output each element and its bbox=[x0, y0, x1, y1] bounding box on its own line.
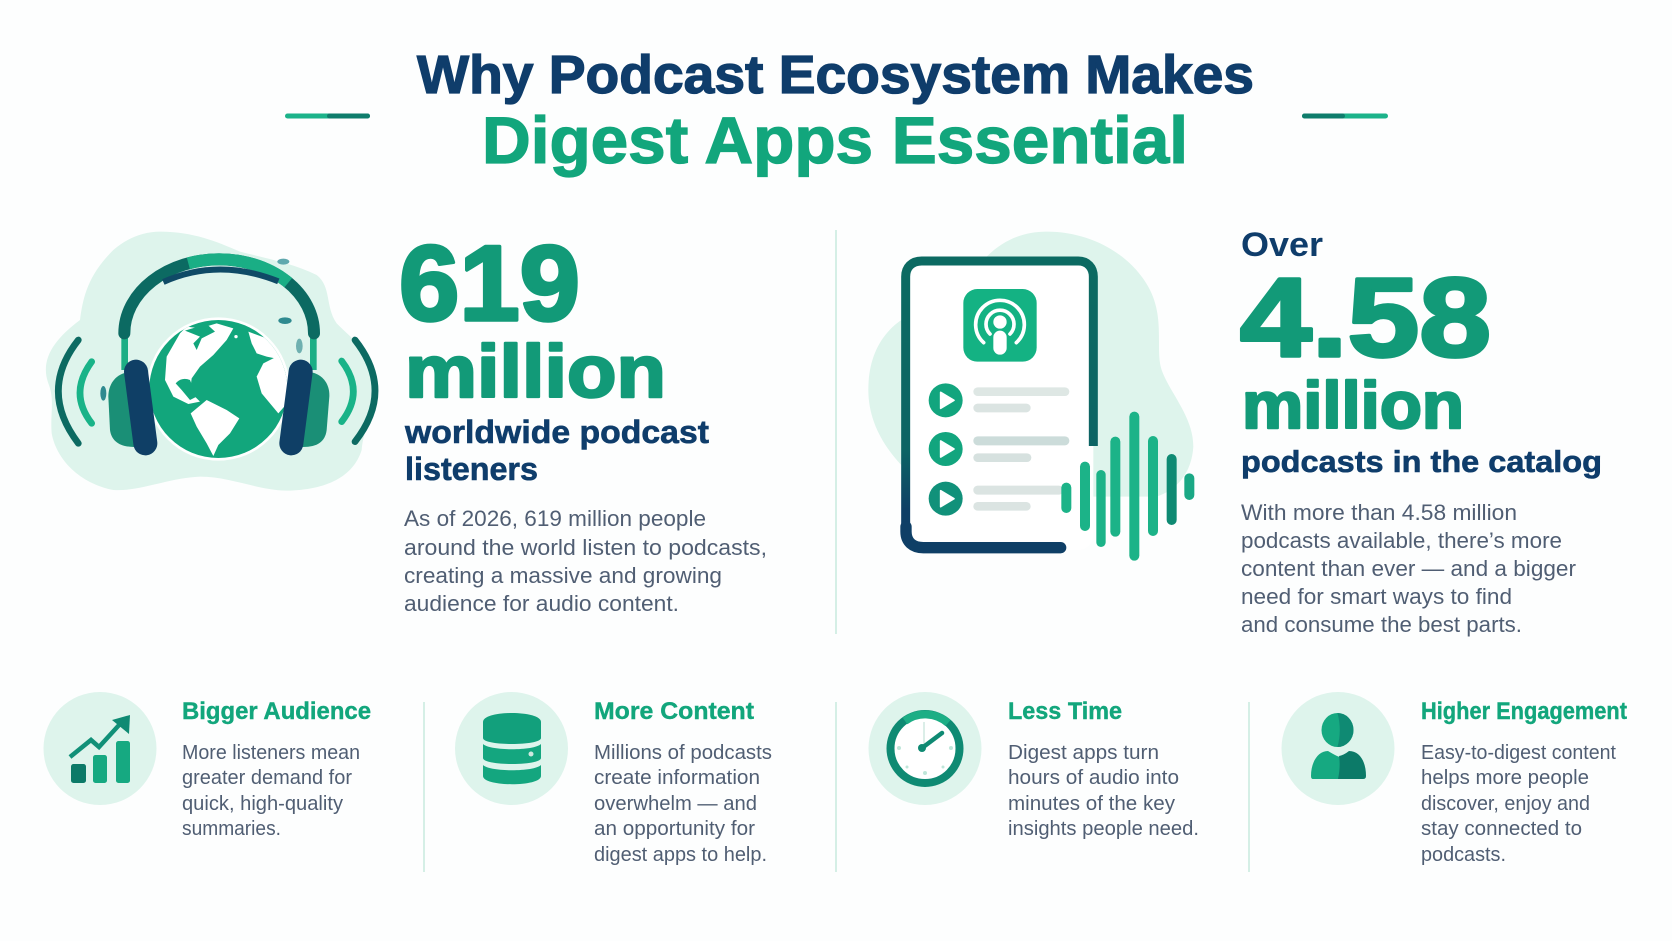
text block: 4.58 million description: need for smart ways to find bbox=[1241, 584, 1512, 609]
text block: 4.58 million description bbox=[1241, 500, 1576, 637]
panel: bigger audience bbox=[44, 692, 371, 840]
text block: 4.58 million description: and consume the best parts. bbox=[1241, 612, 1522, 637]
text block: digest apps to help. bbox=[594, 844, 767, 866]
text block: Easy-to-digest content bbox=[1421, 742, 1616, 764]
text block: 619 million description: creating a massive and growing bbox=[404, 563, 722, 588]
text block bbox=[1421, 742, 1616, 866]
stat label: worldwide podcast listeners bbox=[404, 414, 709, 487]
title rule right bbox=[1302, 114, 1388, 118]
text block: podcasts. bbox=[1421, 844, 1506, 866]
title rule left bbox=[285, 114, 370, 118]
panel: higher engagement bbox=[1282, 692, 1627, 866]
text block: an opportunity for bbox=[594, 818, 755, 840]
text block: minutes of the key bbox=[1008, 793, 1175, 815]
text block: quick, high-quality bbox=[182, 793, 343, 815]
text block: 4.58 million description: content than ever — and a bigger bbox=[1241, 556, 1576, 581]
text block: Millions of podcasts bbox=[594, 742, 772, 764]
text block: helps more people bbox=[1421, 767, 1589, 789]
text block: stay connected to bbox=[1421, 818, 1582, 840]
stat label: worldwide podcast listeners: listeners bbox=[405, 451, 538, 487]
text block: discover, enjoy and bbox=[1421, 793, 1590, 815]
title: Why Podcast Ecosystem Makes bbox=[417, 45, 1254, 105]
text block: create information bbox=[594, 767, 760, 789]
icon: database bbox=[455, 692, 568, 805]
icon: growth chart bbox=[44, 692, 156, 805]
text block: 4.58 million description: With more than 4.58 million bbox=[1241, 500, 1517, 525]
text block: hours of audio into bbox=[1008, 767, 1179, 789]
heading: Bigger Audience bbox=[182, 698, 371, 725]
icon: headphones around globe bbox=[46, 232, 377, 491]
text block: 619 million description bbox=[404, 506, 767, 616]
stat: 619 million bbox=[399, 223, 666, 413]
stat: over 4.58 million: million bbox=[1242, 368, 1464, 442]
icon: person bbox=[1282, 692, 1394, 805]
heading: Higher Engagement bbox=[1421, 698, 1627, 725]
text block bbox=[594, 742, 772, 866]
text block: insights people need. bbox=[1008, 818, 1199, 840]
stat: 619 million: million bbox=[405, 330, 666, 413]
title: Digest Apps Essential bbox=[482, 103, 1188, 177]
text block: overwhelm — and bbox=[594, 793, 757, 815]
text block bbox=[1008, 742, 1199, 840]
text block: 4.58 million description: podcasts available, there’s more bbox=[1241, 528, 1562, 553]
stat: over 4.58 million: Over bbox=[1241, 226, 1323, 264]
text block: Digest apps turn bbox=[1008, 742, 1159, 764]
icon: phone with podcast app and sound wave bbox=[868, 232, 1194, 561]
text block: summaries. bbox=[182, 818, 281, 840]
stat: over 4.58 million bbox=[1240, 226, 1491, 442]
text block: 619 million description: As of 2026, 619 million people bbox=[404, 506, 706, 531]
text block: greater demand for bbox=[182, 767, 352, 789]
stat label: podcasts in the catalog: podcasts in the catalog bbox=[1241, 444, 1602, 479]
panel: more content bbox=[455, 692, 772, 866]
icon: clock bbox=[868, 692, 982, 805]
heading: More Content bbox=[594, 698, 754, 725]
text block bbox=[182, 742, 360, 840]
text block: More listeners mean bbox=[182, 742, 360, 764]
title bbox=[417, 45, 1254, 177]
stat label: worldwide podcast listeners: worldwide podcast bbox=[404, 414, 709, 450]
text block: 619 million description: audience for audio content. bbox=[404, 591, 679, 616]
stat: 619 million: 619 bbox=[399, 223, 580, 343]
panel: less time bbox=[868, 692, 1199, 840]
heading: Less Time bbox=[1008, 698, 1122, 725]
stat: over 4.58 million: 4.58 bbox=[1240, 255, 1491, 380]
text block: 619 million description: around the world listen to podcasts, bbox=[404, 535, 767, 560]
